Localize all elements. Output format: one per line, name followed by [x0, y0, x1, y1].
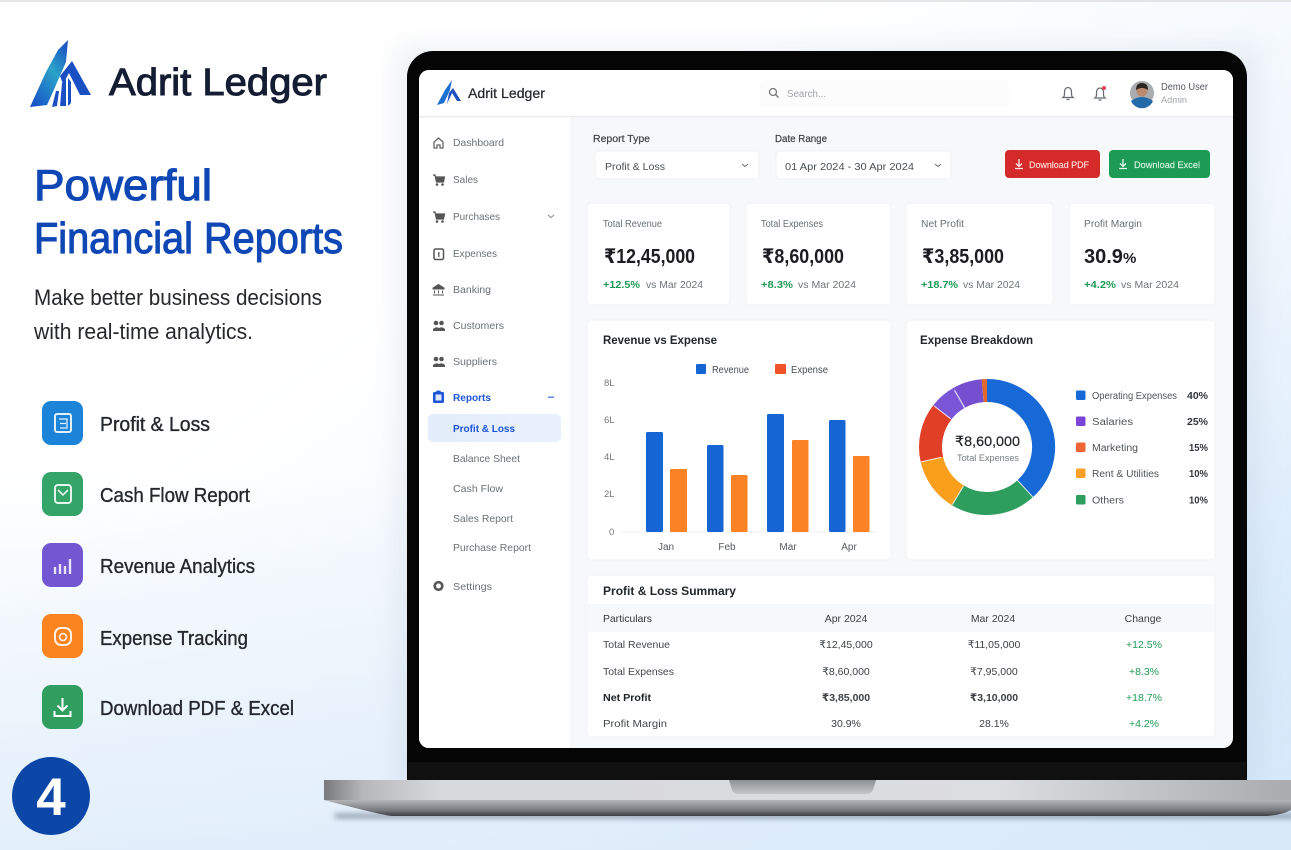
menu: Suppliers: Suppliers	[453, 356, 497, 368]
x axis labels: Feb	[718, 542, 736, 553]
icon: small logo	[437, 80, 461, 105]
card: profit margin: Profit Margin	[1084, 219, 1142, 230]
submenu: Sales Report: Sales Report	[453, 513, 513, 525]
table header row: Apr 2024	[825, 613, 867, 625]
row: total expenses: Total Expenses	[603, 666, 674, 678]
panel: expense breakdown	[906, 320, 1215, 560]
title: Financial Reports	[34, 214, 343, 263]
button: download Excel: Download Excel	[1134, 160, 1200, 171]
title	[34, 161, 343, 263]
filter: report type: Profit & Loss	[605, 161, 665, 173]
menu: Settings	[435, 581, 492, 593]
filter: date range: 01 Apr 2024 - 30 Apr 2024	[785, 161, 914, 173]
chart legend: Revenue	[712, 365, 749, 376]
row: profit margin: +4.2%	[1129, 718, 1159, 730]
chart legend	[696, 364, 828, 376]
row: total revenue: ₹12,45,000	[819, 639, 873, 651]
search box	[760, 80, 1010, 107]
x axis labels: Apr	[841, 542, 857, 553]
search box: Search...	[787, 89, 826, 100]
button: download Excel	[1109, 150, 1210, 178]
row: total revenue: ₹11,05,000	[968, 639, 1020, 651]
icon: notification bell	[1095, 86, 1106, 100]
y axis labels: 6L	[604, 415, 615, 426]
feature list	[42, 401, 294, 729]
feature: Expense Tracking: Expense Tracking	[100, 628, 248, 650]
menu: Expenses: Expenses	[453, 248, 497, 260]
feature: Revenue Analytics	[42, 543, 255, 587]
row: net profit: ₹3,85,000	[822, 692, 870, 704]
filter: date range: Date Range	[775, 134, 827, 145]
submenu: Balance Sheet: Balance Sheet	[453, 453, 520, 465]
laptop base	[324, 780, 1291, 816]
y axis labels: 0	[609, 527, 614, 538]
x axis labels	[658, 542, 857, 553]
feature: Profit & Loss: Profit & Loss	[100, 414, 210, 436]
card: net profit	[906, 203, 1053, 305]
donut legend: Salaries	[1092, 417, 1133, 428]
feature: Profit & Loss	[42, 401, 210, 445]
feature: Revenue Analytics: Revenue Analytics	[100, 556, 255, 578]
row: profit margin: 28.1%	[979, 718, 1009, 730]
filter: report type: Report Type	[593, 134, 650, 145]
card: total expenses: vs Mar 2024	[798, 280, 856, 291]
submenu: Purchase Report: Purchase Report	[453, 542, 531, 554]
row: total expenses: ₹7,95,000	[970, 666, 1018, 678]
row: net profit: Net Profit	[603, 692, 652, 704]
menu: Sales	[433, 174, 478, 186]
menu: Purchases: Purchases	[453, 211, 500, 223]
active submenu: Profit & Loss	[428, 414, 561, 442]
feature: Expense Tracking	[42, 614, 248, 658]
user role: Admin	[1161, 95, 1187, 106]
card: profit margin: +4.2%	[1084, 280, 1116, 291]
menu: Reports	[433, 390, 554, 404]
table header row: Particulars	[603, 613, 652, 625]
feature: Cash Flow Report: Cash Flow Report	[100, 485, 250, 507]
active submenu: Profit & Loss: Profit & Loss	[453, 423, 515, 435]
card: total expenses: +8.3%	[761, 280, 793, 291]
card: total revenue: +12.5%	[603, 280, 640, 291]
donut legend: 15%	[1189, 443, 1208, 454]
row: profit margin: 30.9%	[831, 718, 861, 730]
feature: Download PDF & Excel	[42, 685, 294, 729]
button: download PDF	[1005, 150, 1100, 178]
app name: Adrit Ledger	[468, 85, 545, 101]
panel: revenue vs expense chart	[587, 320, 891, 560]
y axis labels: 2L	[604, 489, 615, 500]
row: profit margin	[603, 718, 1159, 730]
filter: date range	[775, 134, 951, 179]
menu: Settings: Settings	[453, 581, 492, 593]
row: total expenses	[603, 666, 1159, 678]
sidebar background	[419, 117, 570, 748]
chart legend: Expense	[791, 365, 828, 376]
chart heading: Revenue vs Expense	[603, 335, 717, 347]
card: total revenue: Total Revenue	[603, 219, 662, 230]
y axis labels	[604, 378, 615, 538]
donut heading: Expense Breakdown	[920, 335, 1033, 347]
donut legend: 10%	[1189, 496, 1208, 506]
y axis labels: 4L	[604, 452, 615, 463]
card: profit margin	[1069, 203, 1215, 305]
menu: Expenses	[434, 248, 497, 260]
row: total revenue	[603, 639, 1162, 651]
card: total revenue	[587, 203, 730, 305]
row: net profit: ₹3,10,000	[970, 692, 1018, 704]
brand name: Adrit Ledger	[109, 62, 327, 104]
donut legend: 25%	[1187, 417, 1208, 428]
user avatar	[1130, 81, 1154, 108]
laptop bezel	[407, 51, 1247, 780]
row: total revenue: Total Revenue	[603, 639, 670, 651]
card: profit margin: vs Mar 2024	[1121, 280, 1179, 291]
menu: Banking: Banking	[453, 284, 491, 296]
feature: Cash Flow Report	[42, 472, 250, 516]
menu: Purchases	[433, 211, 554, 223]
donut legend: 40%	[1187, 391, 1208, 402]
subtitle: Make better business decisions	[34, 285, 322, 310]
menu: Sales: Sales	[453, 174, 478, 186]
button: download PDF: Download PDF	[1029, 160, 1089, 171]
bars	[646, 414, 870, 532]
card: net profit: Net Profit	[921, 219, 964, 230]
menu: Suppliers	[433, 356, 497, 368]
donut legend: Rent & Utilities	[1092, 469, 1159, 480]
brand logo with wordmark	[30, 40, 327, 107]
dashboard screen	[419, 70, 1233, 748]
donut chart	[921, 390, 1044, 504]
laptop	[324, 45, 1291, 818]
row: net profit: +18.7%	[1126, 692, 1162, 704]
donut legend: 10%	[1189, 469, 1208, 480]
table header row: Change	[1125, 613, 1162, 625]
number badge: 4	[36, 768, 66, 827]
donut legend: Marketing	[1092, 443, 1138, 454]
donut legend: Others	[1092, 496, 1124, 506]
menu: Customers: Customers	[453, 320, 504, 332]
subtitle	[33, 285, 322, 344]
row: total revenue: +12.5%	[1126, 639, 1162, 651]
menu: Banking	[433, 284, 491, 296]
y axis labels: 8L	[604, 378, 615, 389]
submenu: Cash Flow: Cash Flow	[453, 483, 503, 495]
donut centre label: Total Expenses	[957, 453, 1019, 464]
user name: Demo User	[1161, 82, 1209, 93]
card: total revenue: vs Mar 2024	[646, 280, 703, 291]
row: net profit	[603, 692, 1162, 704]
row: total expenses: +8.3%	[1129, 666, 1159, 678]
menu: Reports: Reports	[453, 392, 491, 404]
title: Powerful	[34, 161, 212, 210]
menu: Dashboard: Dashboard	[453, 137, 504, 149]
card: total expenses: ₹8,60,000	[762, 246, 844, 268]
card: profit margin: 30.9%	[1084, 246, 1136, 268]
top bar	[419, 70, 1233, 118]
card: net profit: ₹3,85,000	[922, 246, 1004, 268]
card: total expenses: Total Expenses	[761, 219, 823, 230]
row: profit margin: Profit Margin	[603, 718, 667, 730]
donut legend	[1076, 390, 1208, 506]
feature: Download PDF & Excel: Download PDF & Excel	[100, 698, 294, 720]
icon: bell	[1063, 88, 1073, 100]
card: net profit: +18.7%	[921, 280, 958, 291]
report filters	[593, 134, 1210, 179]
x axis labels: Mar	[779, 542, 797, 553]
panel: profit and loss summary table	[587, 575, 1215, 737]
card: total revenue: ₹12,45,000	[604, 246, 695, 268]
card: net profit: vs Mar 2024	[963, 280, 1020, 291]
sidebar menu	[428, 137, 561, 593]
card: total expenses	[746, 203, 891, 305]
row: total expenses: ₹8,60,000	[822, 666, 870, 678]
donut centre value: ₹8,60,000	[955, 433, 1020, 449]
subtitle: with real-time analytics.	[33, 319, 253, 344]
table heading: Profit & Loss Summary	[603, 586, 737, 598]
table header row	[587, 604, 1215, 632]
x axis labels: Jan	[658, 542, 674, 553]
number badge	[12, 757, 90, 835]
laptop shadow	[335, 814, 1291, 818]
donut legend: Operating Expenses	[1092, 391, 1177, 402]
filter: report type	[593, 134, 759, 179]
KPI cards	[587, 203, 1215, 305]
table header row: Mar 2024	[971, 613, 1015, 625]
icon: logo mark	[30, 40, 91, 107]
